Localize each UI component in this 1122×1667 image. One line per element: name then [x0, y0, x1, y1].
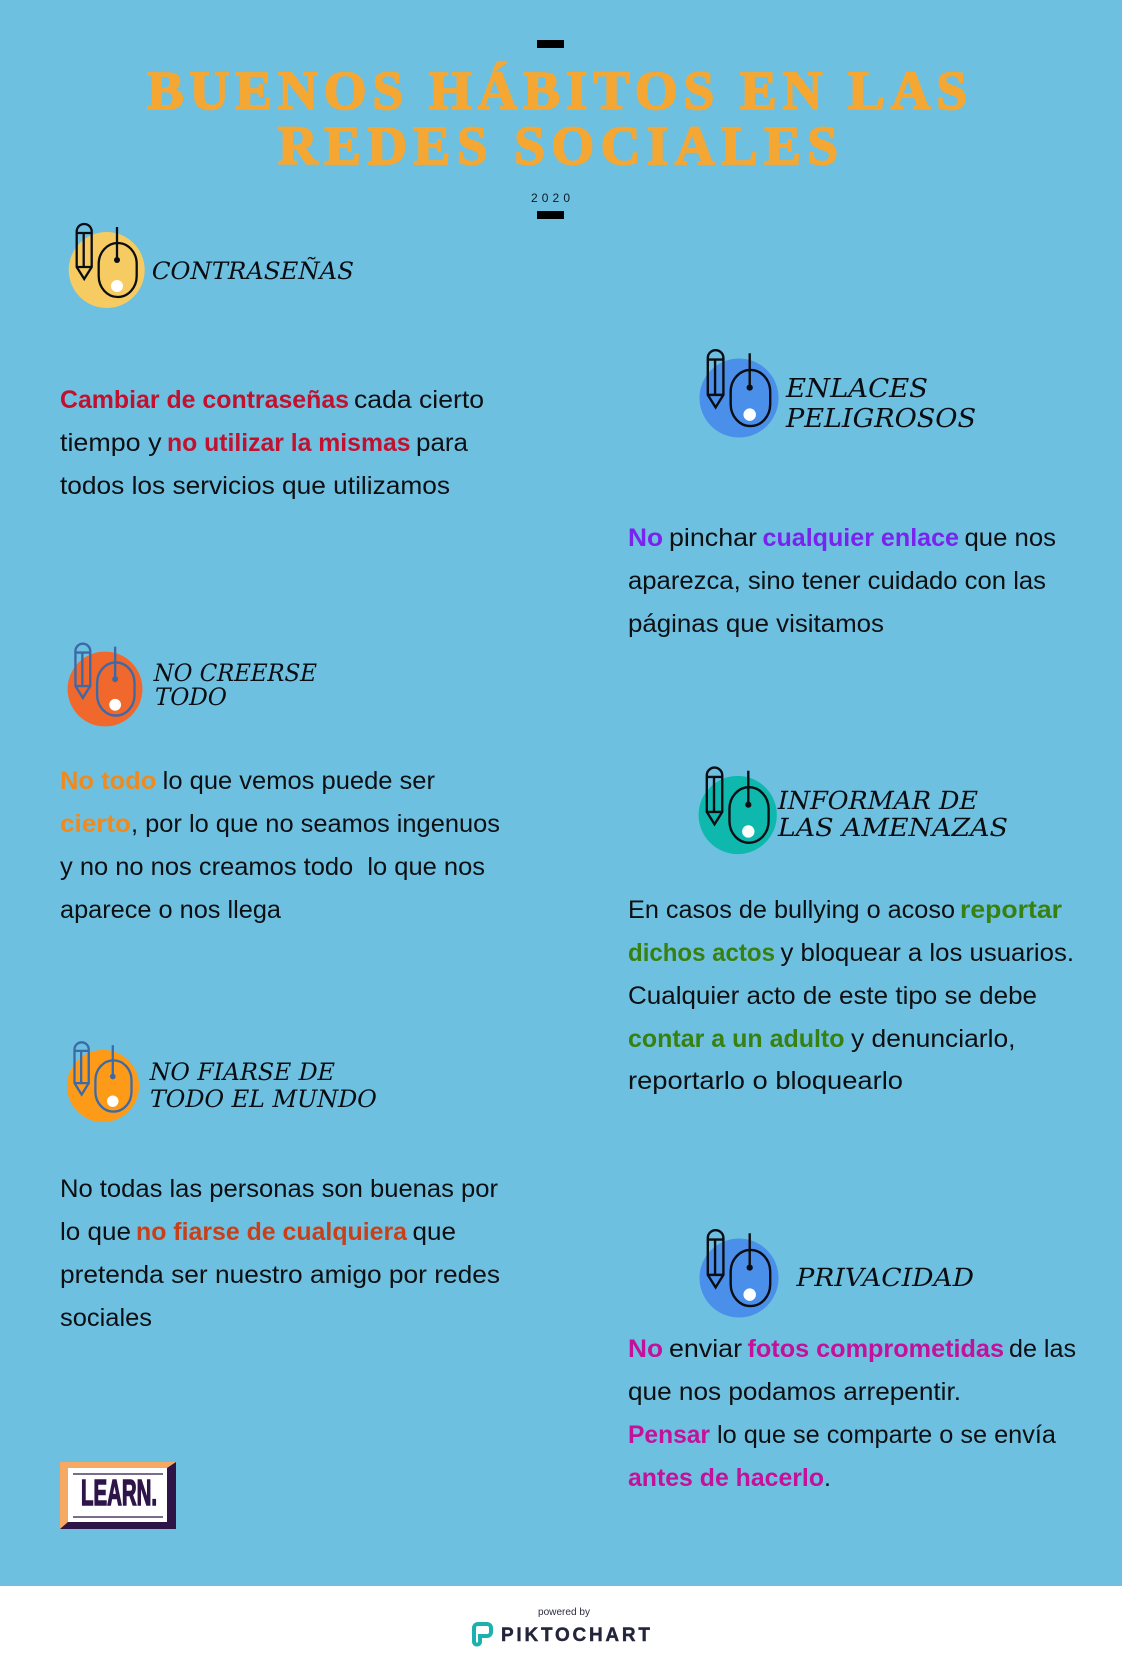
- icon: piktochart logo: [474, 1624, 491, 1644]
- text: informar de las amenazas: En casos de bullying o acoso: [628, 896, 955, 924]
- icon: enlaces peligrosos: [699, 350, 779, 438]
- text: informar de las amenazas: y bloquear a los usuarios.: [780, 939, 1074, 967]
- text: privacidad: de las: [1009, 1335, 1076, 1363]
- text: enlaces peligrosos: páginas que visitamos: [628, 610, 884, 638]
- heading: enlaces peligrosos: PELIGROSOS: [783, 404, 979, 434]
- heading: no creerse todo: NO CREERSE: [151, 658, 320, 687]
- text: privacidad: Pensar: [628, 1421, 710, 1449]
- heading: contraseñas: CONTRASEÑAS: [149, 255, 357, 285]
- text: no fiarse de todo el mundo: lo que: [60, 1218, 131, 1246]
- text: no creerse todo: cierto: [60, 810, 131, 838]
- text: no creerse todo: aparece o nos llega: [60, 896, 281, 924]
- year: [531, 191, 570, 219]
- text: no creerse todo: y no no nos creamos todo lo que nos: [60, 853, 485, 881]
- text: privacidad: antes de hacerlo: [628, 1464, 824, 1492]
- text: enlaces peligrosos: [628, 524, 1056, 638]
- text: contraseñas: no utilizar la mismas: [167, 429, 410, 457]
- heading: informar de las amenazas: [775, 786, 1011, 842]
- text: informar de las amenazas: [628, 896, 1074, 1095]
- text: contraseñas: tiempo y: [60, 429, 162, 457]
- title: REDES SOCIALES: [278, 115, 838, 176]
- text: enlaces peligrosos: pinchar: [669, 524, 757, 552]
- text: no creerse todo: No todo: [60, 767, 156, 795]
- heading: no creerse todo: [151, 658, 320, 711]
- text: no fiarse de todo el mundo: sociales: [60, 1304, 152, 1332]
- text: contraseñas: para: [416, 429, 468, 457]
- badge: learn: LEARN.: [81, 1472, 157, 1513]
- text: enlaces peligrosos: que nos: [964, 524, 1056, 552]
- text: no fiarse de todo el mundo: pretenda ser nuestro amigo por redes: [60, 1261, 500, 1289]
- text: privacidad: enviar: [669, 1335, 742, 1363]
- heading: privacidad: PRIVACIDAD: [793, 1263, 977, 1292]
- text: privacidad: .: [824, 1464, 831, 1492]
- text: informar de las amenazas: y denunciarlo,: [851, 1025, 1016, 1053]
- powered by: powered by: [538, 1606, 591, 1618]
- title: BUENOS HÁBITOS EN LAS: [147, 60, 967, 121]
- piktochart wordmark: PIKTOCHART: [501, 1625, 650, 1646]
- heading: enlaces peligrosos: [783, 374, 979, 434]
- text: contraseñas: Cambiar de contraseñas: [60, 386, 349, 414]
- heading: informar de las amenazas: INFORMAR DE: [775, 786, 981, 815]
- icon: informar de las amenazas: [699, 768, 777, 854]
- badge: learn: [60, 1462, 176, 1529]
- text: no fiarse de todo el mundo: [60, 1175, 500, 1332]
- text: enlaces peligrosos: aparezca, sino tener cuidado con las: [628, 567, 1046, 595]
- text: privacidad: que nos podamos arrepentir.: [628, 1378, 961, 1406]
- text: informar de las amenazas: reportarlo o bloquearlo: [628, 1067, 903, 1095]
- heading: informar de las amenazas: LAS AMENAZAS: [775, 813, 1011, 842]
- icon: no fiarse de todo el mundo: [67, 1042, 139, 1122]
- heading: no fiarse de todo el mundo: TODO EL MUNDO: [147, 1084, 380, 1113]
- heading: no fiarse de todo el mundo: [147, 1057, 380, 1113]
- icon: contraseñas: [69, 224, 145, 308]
- text: no fiarse de todo el mundo: no fiarse de cualquiera: [136, 1218, 408, 1246]
- text: no creerse todo: lo que vemos puede ser: [163, 767, 435, 795]
- heading: no fiarse de todo el mundo: NO FIARSE DE: [147, 1057, 338, 1086]
- title: [147, 40, 967, 176]
- text: privacidad: No: [628, 1335, 663, 1363]
- text: informar de las amenazas: dichos actos: [628, 939, 775, 967]
- text: contraseñas: todos los servicios que utilizamos: [60, 472, 450, 500]
- text: privacidad: fotos comprometidas: [748, 1335, 1004, 1363]
- text: enlaces peligrosos: cualquier enlace: [762, 524, 959, 552]
- text: no fiarse de todo el mundo: que: [412, 1218, 456, 1246]
- year: 2020: [531, 191, 570, 205]
- text: privacidad: [628, 1335, 1076, 1492]
- text: enlaces peligrosos: No: [628, 524, 663, 552]
- text: informar de las amenazas: Cualquier acto de este tipo se debe: [628, 982, 1037, 1010]
- text: no creerse todo: [60, 767, 500, 924]
- text: informar de las amenazas: contar a un adulto: [628, 1025, 844, 1053]
- text: no fiarse de todo el mundo: No todas las personas son buenas por: [60, 1175, 498, 1203]
- icon: no creerse todo: [68, 644, 142, 726]
- icon: privacidad: [699, 1230, 779, 1318]
- footer: [0, 1586, 1122, 1667]
- text: contraseñas: [60, 386, 484, 500]
- heading: enlaces peligrosos: ENLACES: [783, 374, 931, 404]
- text: contraseñas: cada cierto: [354, 386, 484, 414]
- text: privacidad: lo que se comparte o se envía: [717, 1421, 1056, 1449]
- text: informar de las amenazas: reportar: [960, 896, 1062, 924]
- text: no creerse todo: , por lo que no seamos ingenuos: [131, 810, 500, 838]
- heading: no creerse todo: TODO: [152, 682, 230, 711]
